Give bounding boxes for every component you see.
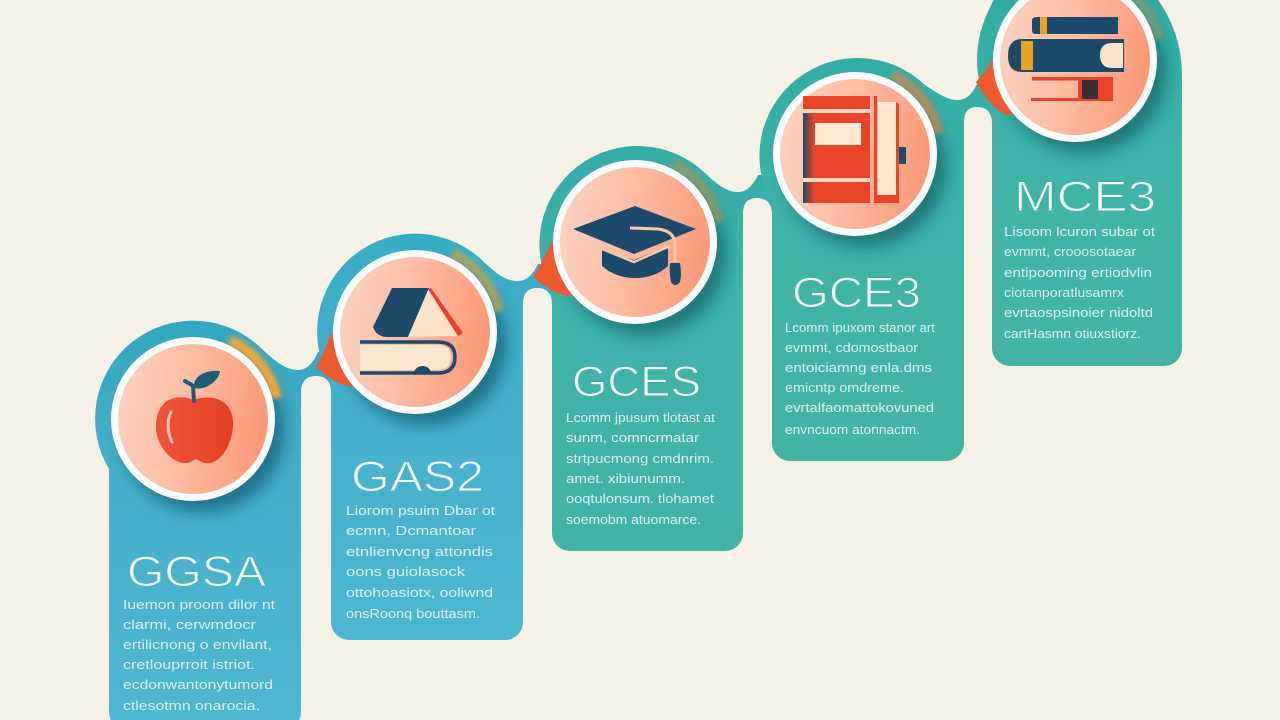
icon: notebook [803, 96, 906, 203]
arrow marker [976, 60, 1012, 116]
heading: MCE3 [1014, 173, 1156, 221]
body text: cretlouprroit istriot. [123, 657, 255, 672]
circle shadow [121, 349, 285, 513]
body text: Liorom psuim Dbar ot [346, 503, 495, 518]
accent glow [892, 75, 939, 133]
icon: stacked books [1008, 17, 1124, 101]
icon disc [556, 164, 714, 320]
panel: step 3 GCES [533, 146, 786, 551]
body text: oons guiolasock [346, 564, 466, 579]
icon disc [776, 76, 934, 232]
heading: GCES [572, 358, 701, 406]
panel: step 4 GCE3 [759, 58, 1006, 461]
icon: graduation cap [573, 206, 696, 285]
accent glow [452, 253, 499, 311]
body text: Iuemon proom dilor nt [123, 597, 275, 612]
body text: onsRoonq bouttasm. [346, 606, 480, 621]
card shape with connector [317, 234, 566, 640]
body text: ooqtulonsum. tlohamet [566, 491, 714, 506]
body text: clarmi, cerwmdocr [123, 617, 257, 632]
body text: ottohoasiotx, ooliwnd [346, 585, 493, 600]
body text: amet. xibiunumm. [566, 471, 685, 486]
body text: cartHasmn otiuxstiorz. [1004, 326, 1141, 341]
body text: ecdonwantonytumord [123, 677, 273, 692]
heading: GAS2 [351, 453, 484, 501]
circle shadow [343, 262, 507, 426]
heading: GGSA [127, 548, 266, 596]
body text [1004, 224, 1155, 341]
body text: ctlesotmn onarocia. [123, 698, 260, 713]
card shape with connector [95, 321, 345, 720]
panel: step 1 GGSA [95, 321, 345, 720]
icon: open book [360, 288, 463, 373]
icon disc [114, 340, 272, 498]
body text: entipooming ertiodvlin [1004, 265, 1152, 280]
body text: envncuom atonnactm. [785, 422, 920, 437]
body text: evrtalfaomattokovuned [785, 400, 934, 415]
arrow marker [316, 332, 352, 386]
body text [785, 320, 935, 437]
body text [123, 597, 275, 713]
body text: sunm, comncrmatar [566, 430, 700, 445]
card shape [977, 0, 1182, 366]
body text: ciotanporatlusamrx [1004, 285, 1125, 300]
body text: entoiciamng enla.dms [785, 360, 933, 375]
body text: Lisoom lcuron subar ot [1004, 224, 1155, 239]
icon disc [336, 254, 494, 410]
circle shadow [563, 172, 727, 336]
body text: evmmt, cdomostbaor [785, 340, 919, 355]
body text: ecmn, Dcmantoar [346, 523, 477, 538]
body text: soemobm atuomarce. [566, 512, 701, 527]
body text [346, 503, 495, 621]
circle shadow [1003, 0, 1167, 154]
body text: evrtaospsinoier nidoltd [1004, 305, 1153, 320]
body text: Lcomm ipuxom stanor art [785, 320, 935, 335]
icon disc [996, 0, 1154, 138]
panel: step 2 GAS2 [316, 234, 566, 640]
body text: etnlienvcng attondis [346, 544, 494, 559]
accent glow [1112, 0, 1159, 39]
body text: Lcomm jpusum tlotast at [566, 410, 715, 425]
body text: emicntp omdreme. [785, 380, 904, 395]
body text [566, 410, 715, 527]
card shape with connector [759, 58, 1006, 461]
icon: apple [156, 371, 233, 463]
circle shadow [783, 84, 947, 248]
heading: GCE3 [792, 269, 921, 317]
accent glow [230, 340, 277, 398]
arrow marker [533, 240, 572, 296]
body text: strtpucmong cmdnrim. [566, 451, 714, 466]
accent glow [672, 163, 719, 221]
body text: evmmt, crooosotaear [1004, 244, 1137, 259]
body text: ertilicnong o envilant, [123, 637, 272, 652]
panel: step 5 MCE3 [976, 0, 1182, 366]
card shape with connector [539, 146, 786, 551]
